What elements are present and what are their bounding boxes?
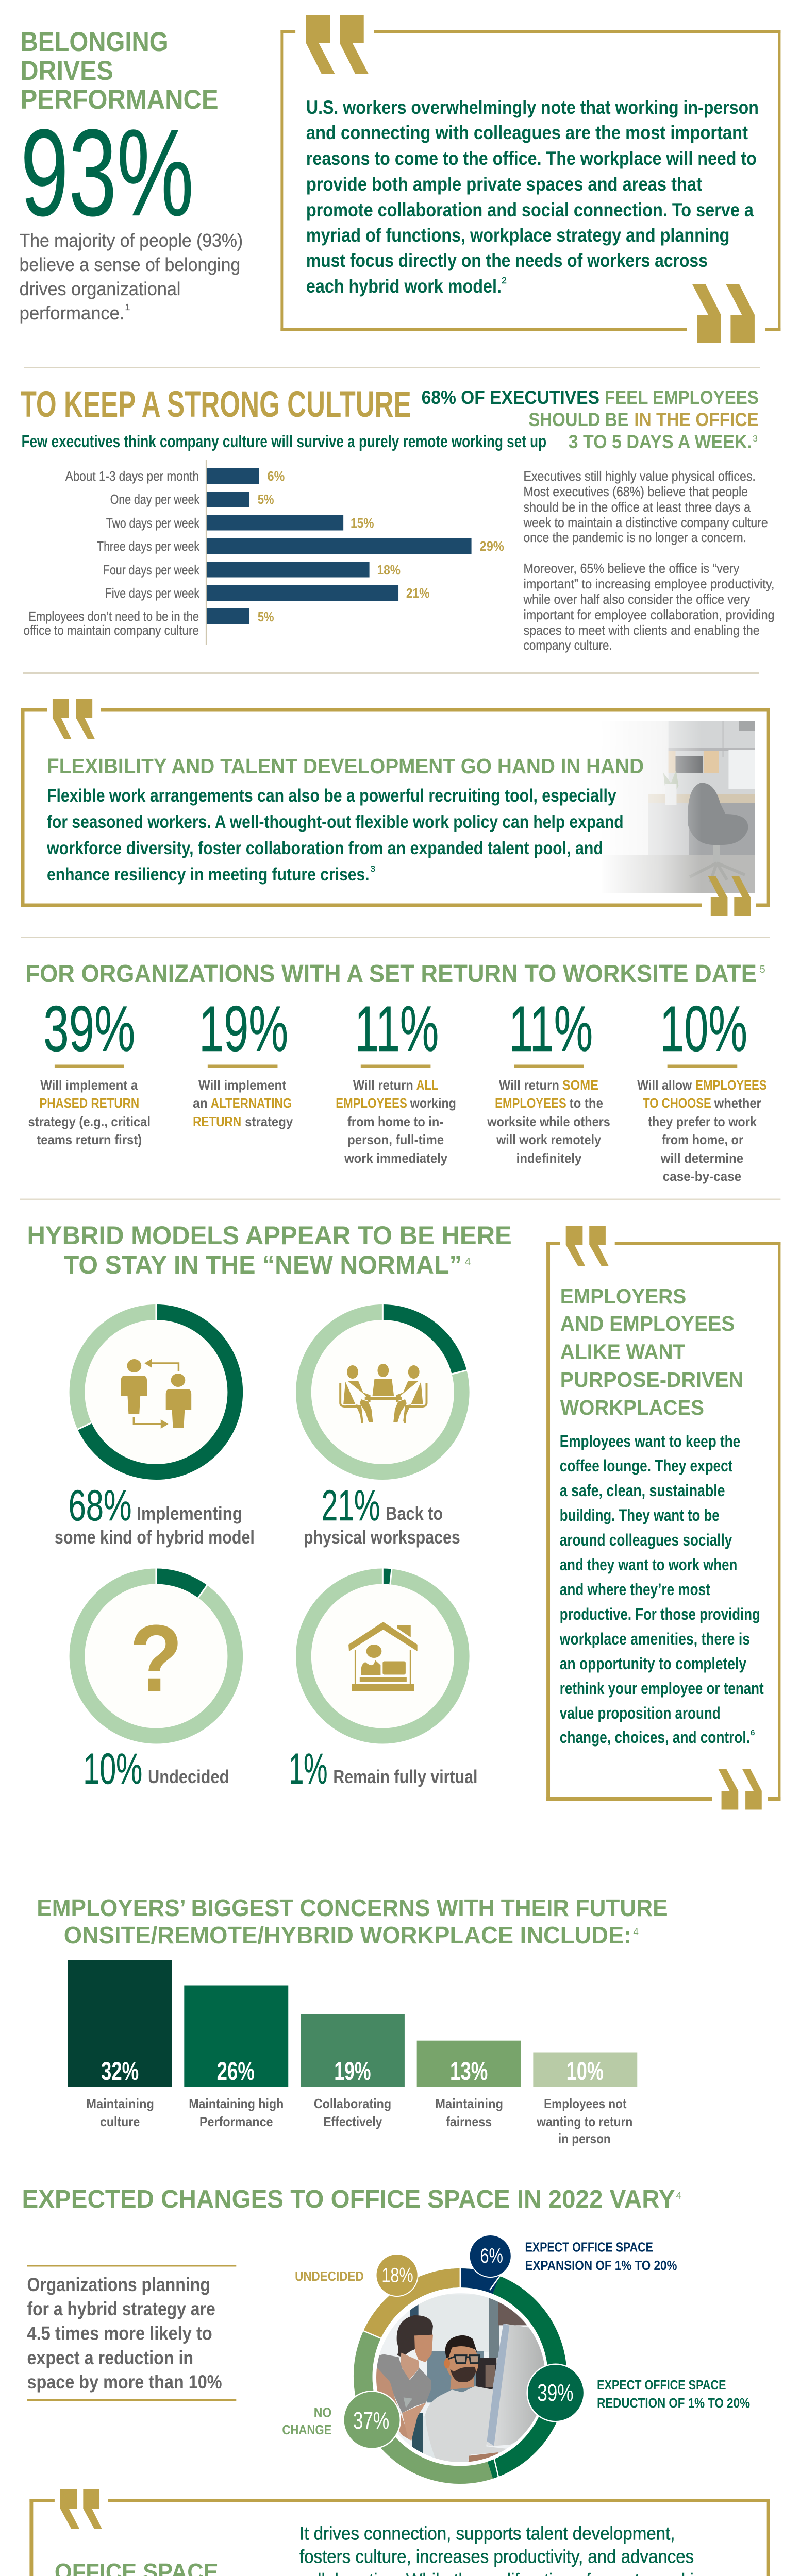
marker: 39%: [526, 2364, 585, 2422]
photo: faded office with chair: [599, 720, 755, 894]
text: employees want: coffee lounge. They expect: [560, 1456, 733, 1475]
bar chart: days in office: 5%: [258, 493, 274, 507]
text: executives value offices: important” to increasing employee productivity,: [524, 577, 775, 591]
panel: expected changes to office space: [22, 2185, 750, 2506]
icon: closing quotation mark: [719, 1769, 762, 1809]
stat column: 10% employees choose: 10%: [660, 993, 747, 1065]
callout: 68% of executives: [422, 387, 759, 452]
chart labels: culture: [100, 2115, 140, 2129]
bar chart: concerns: 13%: [450, 2057, 488, 2086]
stat column: 19% alternating return: an: [193, 1096, 208, 1111]
label: undecided: UNDECIDED: [295, 2269, 364, 2284]
stat column: 11% all employees: EMPLOYEES: [336, 1096, 407, 1111]
stat column: 11% some employees: SOME: [562, 1078, 598, 1093]
label: 10% undecided: [83, 1744, 229, 1793]
text: employees want: around colleagues socially: [560, 1531, 732, 1549]
label: 21% back to physical: 21%: [322, 1481, 380, 1530]
label: 68% implementing hybrid: [55, 1481, 255, 1548]
quote text: each hybrid work model.: [306, 276, 502, 297]
text: employees want: 6: [751, 1728, 755, 1737]
icon: two people swapping: [121, 1359, 191, 1429]
chart labels: fairness: [446, 2115, 492, 2129]
stat column: 10% employees choose: [637, 993, 767, 1184]
chart labels: Maintaining: [86, 2097, 154, 2111]
bar chart: days in office: Five days per week: [105, 586, 199, 601]
text: flexible work arrangements: Flexible work arrangements can also be a powerful recruiting tool, especially: [47, 786, 616, 806]
bar chart: days in office: One day per week: [110, 493, 199, 507]
quote text: provide both ample private spaces and areas that: [306, 174, 702, 195]
marker: 18%: [375, 2253, 419, 2297]
callout: 4.5 times more likely: expect a reduction in: [27, 2347, 193, 2368]
stat column: 11% all employees: Will return: [353, 1078, 413, 1093]
heading: purpose-driven workplaces: ALIKE WANT: [560, 1340, 685, 1364]
heading: flexibility: FLEXIBILITY AND TALENT DEVELOPMENT GO HAND IN HAND: [47, 754, 644, 778]
heading: belonging drives performance: DRIVES: [21, 56, 113, 86]
label: expansion: EXPANSION OF 1% TO 20%: [525, 2259, 677, 2273]
label: 21% back to physical: Back to: [386, 1503, 443, 1524]
text: it drives connection: It drives connection, supports talent development,: [299, 2523, 675, 2544]
quote frame: [21, 708, 770, 907]
stat column: 19% alternating return: 19%: [199, 993, 288, 1065]
callout: 4.5 times more likely: 4.5 times more likely to: [27, 2323, 212, 2344]
heading: belonging drives performance: BELONGING: [21, 27, 169, 57]
text: executives value offices: should be in the office at least three days a: [524, 500, 751, 515]
text: employees want: and they want to work when: [560, 1555, 737, 1574]
stat column: 19% alternating return: strategy: [245, 1115, 293, 1129]
icon: opening quotation mark: [306, 15, 369, 74]
quote text: 2: [502, 275, 507, 285]
label: expansion: [525, 2240, 677, 2273]
bar chart: concerns: 19%: [334, 2057, 371, 2086]
bar chart: days in office: 15%: [351, 516, 374, 531]
marker: 37%: [343, 2391, 401, 2449]
bar chart: days in office: 21%: [406, 586, 429, 601]
callout: flexibility and talent development: [21, 699, 770, 916]
text: employees want: building. They want to be: [560, 1506, 720, 1524]
panel: employers' biggest concerns: [37, 1895, 668, 2146]
stat column: 19% alternating return: RETURN: [193, 1115, 241, 1129]
quote frame: [546, 1242, 780, 1801]
stat column: 10% employees choose: will determine: [660, 1151, 743, 1166]
text: employees want: [559, 1432, 764, 1747]
chart labels: in person: [558, 2132, 611, 2146]
stat column: 11% some employees: indefinitely: [516, 1151, 582, 1166]
bar chart: concerns: 26%: [217, 2057, 255, 2086]
icon: question mark: ?: [129, 1605, 182, 1711]
label: 1% remain fully virtual: Remain fully virtual: [333, 1767, 477, 1787]
bar chart: concerns: 10%: [566, 2057, 604, 2086]
icon: opening quotation mark: [566, 1226, 609, 1266]
heading: hybrid models: [27, 1221, 512, 1279]
heading: biggest concerns: 4: [633, 1927, 639, 1938]
label: 10% undecided: 10%: [83, 1744, 142, 1793]
text: executives value offices: company culture.: [524, 638, 612, 653]
stat column: 19% alternating return: ALTERNATING: [211, 1096, 292, 1111]
text: majority of people: believe a sense of belonging: [20, 255, 240, 275]
label: 68% implementing hybrid: 68%: [69, 1481, 131, 1530]
text: executives value offices: Executives still highly value physical offices.: [524, 469, 756, 484]
quote text: and connecting with colleagues are the most important: [306, 122, 748, 143]
quote text: promote collaboration and social connection. To serve a: [306, 199, 754, 221]
chart labels: Collaborating: [314, 2097, 391, 2111]
text: employees want: change, choices, and control.: [560, 1728, 750, 1747]
bar chart: days in office: Employees don’t need to be in the: [28, 609, 199, 624]
label: reduction: [597, 2378, 750, 2411]
text: flexible work arrangements: workforce diversity, foster collaboration from an expanded talent pool, and: [46, 838, 603, 858]
stat column: 39% phased return: [28, 993, 151, 1147]
heading: purpose-driven workplaces: WORKPLACES: [560, 1396, 704, 1419]
label: 1% remain fully virtual: 1%: [289, 1744, 327, 1793]
stat column: 11% all employees: 11%: [355, 993, 439, 1065]
donut: 10% undecided: [77, 1568, 235, 1736]
heading: belonging drives performance: [21, 27, 219, 115]
stat column: 10% employees choose: they prefer to work: [648, 1115, 757, 1129]
chart labels: Maintaining: [435, 2097, 503, 2111]
stat column: 11% some employees: [487, 993, 610, 1166]
chart labels: Maintaining high: [189, 2097, 284, 2111]
chart labels: Performance: [199, 2115, 273, 2129]
quote frame: [29, 2499, 770, 2576]
stat: 93%: 93%: [21, 104, 194, 242]
text: executives value offices: important for employee collaboration, providing: [524, 608, 775, 622]
text: employees want: Employees want to keep the: [560, 1432, 740, 1451]
text: it drives connection: [299, 2523, 742, 2576]
text: executives value offices: Most executives (68%) believe that people: [524, 485, 748, 499]
stat column: 10% employees choose: from home, or: [662, 1133, 743, 1147]
text: majority of people: performance.: [20, 303, 125, 324]
label: no change: [282, 2405, 331, 2437]
icon: person working from home: [348, 1622, 418, 1691]
heading: to keep a strong culture: TO KEEP A STRONG CULTURE: [21, 384, 411, 425]
stat column: 11% all employees: working: [410, 1096, 456, 1111]
icon: closing quotation mark: [692, 284, 755, 343]
panel: hybrid models: [20, 1198, 780, 1793]
callout: 68% of executives: 3: [753, 433, 758, 444]
bar chart: days in office: 29%: [479, 539, 504, 554]
stat column: 10% employees choose: case-by-case: [663, 1170, 741, 1184]
bar chart: days in office: 5%: [258, 610, 274, 624]
callout: 68% of executives: 3 TO 5 DAYS A WEEK.: [569, 431, 752, 452]
bar chart: days in office: office to maintain company culture: [24, 623, 199, 638]
heading: hybrid models: TO STAY IN THE “NEW NORMAL”: [64, 1250, 462, 1279]
heading: expected changes: 4: [676, 2190, 681, 2201]
stat column: 19% alternating return: Will implement: [198, 1078, 287, 1093]
bar chart: days in office: 18%: [377, 563, 401, 578]
panel: to keep a strong culture: [21, 367, 775, 674]
text: flexible work arrangements: enhance resiliency in meeting future crises.: [47, 865, 370, 885]
heading: purpose-driven workplaces: AND EMPLOYEES: [560, 1312, 735, 1335]
callout: 4.5 times more likely: for a hybrid strategy are: [27, 2298, 215, 2319]
callout: employers and employees purpose-driven: [546, 1226, 780, 1809]
label: 1% remain fully virtual: [289, 1744, 477, 1793]
stat column: 11% some employees: will work remotely: [496, 1133, 602, 1147]
callout: 68% of executives: IN THE OFFICE: [634, 409, 759, 430]
text: executives value offices: week to maintain a distinctive company culture: [523, 516, 768, 530]
stat column: 19% alternating return: [193, 993, 293, 1129]
chart labels: wanting to return: [536, 2115, 632, 2129]
callout: 4.5 times more likely: Organizations planning: [27, 2274, 210, 2295]
text: employees want: value proposition around: [560, 1704, 721, 1722]
heading: biggest concerns: [37, 1895, 668, 1948]
stat column: 39% phased return: PHASED RETURN: [39, 1096, 139, 1111]
heading: purpose-driven workplaces: [560, 1284, 743, 1419]
stat column: 10% employees choose: whether: [714, 1096, 761, 1111]
marker: 18%: 18%: [381, 2264, 413, 2287]
stat column: 11% some employees: to the: [570, 1096, 603, 1111]
text: executives value offices: spaces to meet with clients and enabling the: [524, 623, 760, 638]
panel: belonging drives performance: [20, 27, 243, 324]
stat column: 11% all employees: work immediately: [344, 1151, 448, 1166]
callout: 68% of executives: SHOULD BE: [528, 409, 628, 430]
label: 10% undecided: Undecided: [148, 1767, 229, 1787]
bar chart: days in office: [24, 460, 504, 645]
quote text: must focus directly on the needs of workers across: [306, 250, 708, 271]
stat column: 11% some employees: worksite while others: [487, 1115, 610, 1129]
text: employees want: a safe, clean, sustainable: [560, 1481, 725, 1500]
heading: set return to worksite date: FOR ORGANIZATIONS WITH A SET RETURN TO WORKSITE DATE: [25, 960, 757, 988]
icon: people meeting at table: [340, 1364, 426, 1423]
callout: 4.5 times more likely: space by more than 10%: [27, 2371, 222, 2393]
heading: hybrid models: 4: [465, 1256, 471, 1268]
subheading: Few executives think company culture will survive a purely remote working set up: [22, 432, 546, 451]
heading: set return to worksite date: 5: [760, 964, 765, 975]
text: employees want: an opportunity to completely: [560, 1654, 746, 1673]
stat column: 11% some employees: EMPLOYEES: [495, 1096, 566, 1111]
label: reduction: EXPECT OFFICE SPACE: [597, 2378, 726, 2393]
callout: 4.5 times more likely: [27, 2265, 236, 2401]
quote text: myriad of functions, workplace strategy and planning: [306, 225, 729, 246]
icon: opening quotation mark: [53, 699, 95, 739]
chart labels: Employees not: [544, 2097, 627, 2111]
text: majority of people: 1: [125, 302, 130, 312]
bar chart: concerns: 32%: [101, 2057, 139, 2086]
stat column: 11% some employees: 11%: [509, 993, 593, 1065]
callout: 68% of executives: FEEL EMPLOYEES: [605, 387, 759, 408]
text: flexible work arrangements: for seasoned workers. A well-thought-out flexible work policy can help expand: [47, 812, 624, 832]
donut: 68% hybrid: [77, 1304, 235, 1472]
text: employees want: workplace amenities, there is: [559, 1630, 750, 1648]
donut chart: office space change: [344, 2235, 584, 2484]
marker: 6%: [469, 2234, 512, 2278]
label: reduction: REDUCTION OF 1% TO 20%: [597, 2396, 750, 2411]
bar chart: days in office: About 1-3 days per month: [65, 469, 199, 484]
text: executives value offices: Moreover, 65% believe the office is “very: [524, 562, 739, 576]
callout: office space has the power: [29, 2489, 770, 2576]
stat column: 39% phased return: Will implement a: [40, 1078, 138, 1093]
stat column: 39% phased return: teams return first): [37, 1133, 142, 1147]
text: employees want: and where they’re most: [560, 1580, 710, 1599]
text: flexible work arrangements: [46, 786, 624, 885]
text: employees want: productive. For those providing: [560, 1605, 760, 1623]
donut: 1% remain virtual: [304, 1568, 462, 1736]
text: executives value offices: [523, 469, 775, 653]
stat column: 11% all employees: ALL: [416, 1078, 438, 1093]
marker: 37%: 37%: [353, 2408, 389, 2434]
icon: opening quotation mark: [60, 2489, 102, 2529]
label: 21% back to physical: [304, 1481, 460, 1548]
chart labels: [86, 2097, 632, 2146]
heading: biggest concerns: EMPLOYERS’ BIGGEST CONCERNS WITH THEIR FUTURE: [37, 1895, 668, 1921]
label: 21% back to physical: physical workspaces: [304, 1527, 460, 1548]
callout: U.S. workers quote: [280, 15, 780, 343]
heading: purpose-driven workplaces: PURPOSE-DRIVEN: [560, 1368, 743, 1392]
label: 68% implementing hybrid: some kind of hybrid model: [55, 1527, 255, 1548]
stat column: 11% all employees: [336, 993, 456, 1166]
label: expansion: EXPECT OFFICE SPACE: [525, 2240, 653, 2255]
marker: 6%: 6%: [480, 2245, 503, 2267]
quote frame: [280, 30, 780, 331]
marker: 39%: 39%: [537, 2380, 574, 2406]
bar chart: concerns: [68, 1960, 637, 2087]
heading: hybrid models: HYBRID MODELS APPEAR TO BE HERE: [27, 1221, 512, 1250]
bar chart: days in office: Four days per week: [103, 563, 199, 578]
stat column: 10% employees choose: Will allow: [637, 1078, 692, 1093]
photo: two colleagues at a monitor: [375, 2293, 548, 2464]
stat column: 39% phased return: 39%: [43, 993, 135, 1065]
heading: expected changes: EXPECTED CHANGES TO OFFICE SPACE IN 2022 VARY: [22, 2185, 675, 2213]
quote text: [306, 97, 759, 297]
stat column: 11% all employees: person, full-time: [347, 1133, 444, 1147]
callout: 68% of executives: 68% OF EXECUTIVES: [422, 387, 599, 408]
stat column: 10% employees choose: EMPLOYEES: [695, 1078, 767, 1093]
heading: belonging drives performance: PERFORMANCE: [21, 84, 219, 115]
icon: closing quotation mark: [708, 876, 751, 916]
text: executives value offices: once the pandemic is no longer a concern.: [524, 531, 746, 545]
label: no change: NO: [314, 2405, 331, 2420]
heading: purpose-driven workplaces: EMPLOYERS: [560, 1284, 686, 1308]
stat column: 10% employees choose: TO CHOOSE: [643, 1096, 711, 1111]
heading: biggest concerns: ONSITE/REMOTE/HYBRID WORKPLACE INCLUDE:: [64, 1922, 631, 1948]
bar chart: days in office: 6%: [268, 469, 285, 484]
stat column: 11% all employees: from home to in-: [347, 1115, 443, 1129]
text: majority of people: [20, 230, 243, 324]
panel: organizations with a set return date: [21, 937, 770, 1184]
chart labels: Effectively: [324, 2115, 382, 2129]
text: it drives connection: fosters culture, increases productivity, and advances: [299, 2547, 694, 2567]
label: 68% implementing hybrid: Implementing: [137, 1503, 242, 1524]
stat column: 39% phased return: strategy (e.g., critical: [28, 1115, 151, 1129]
bar chart: days in office: Three days per week: [97, 539, 199, 554]
text: majority of people: The majority of people (93%): [20, 230, 243, 251]
text: majority of people: drives organizational: [20, 279, 180, 299]
bar chart: days in office: Two days per week: [106, 516, 199, 531]
stat column: 11% some employees: Will return: [499, 1078, 559, 1093]
text: flexible work arrangements: 3: [371, 864, 375, 874]
donut: 21% back to physical: [304, 1304, 466, 1472]
text: executives value offices: while over half also consider the office very: [523, 592, 750, 607]
label: no change: CHANGE: [282, 2423, 331, 2437]
